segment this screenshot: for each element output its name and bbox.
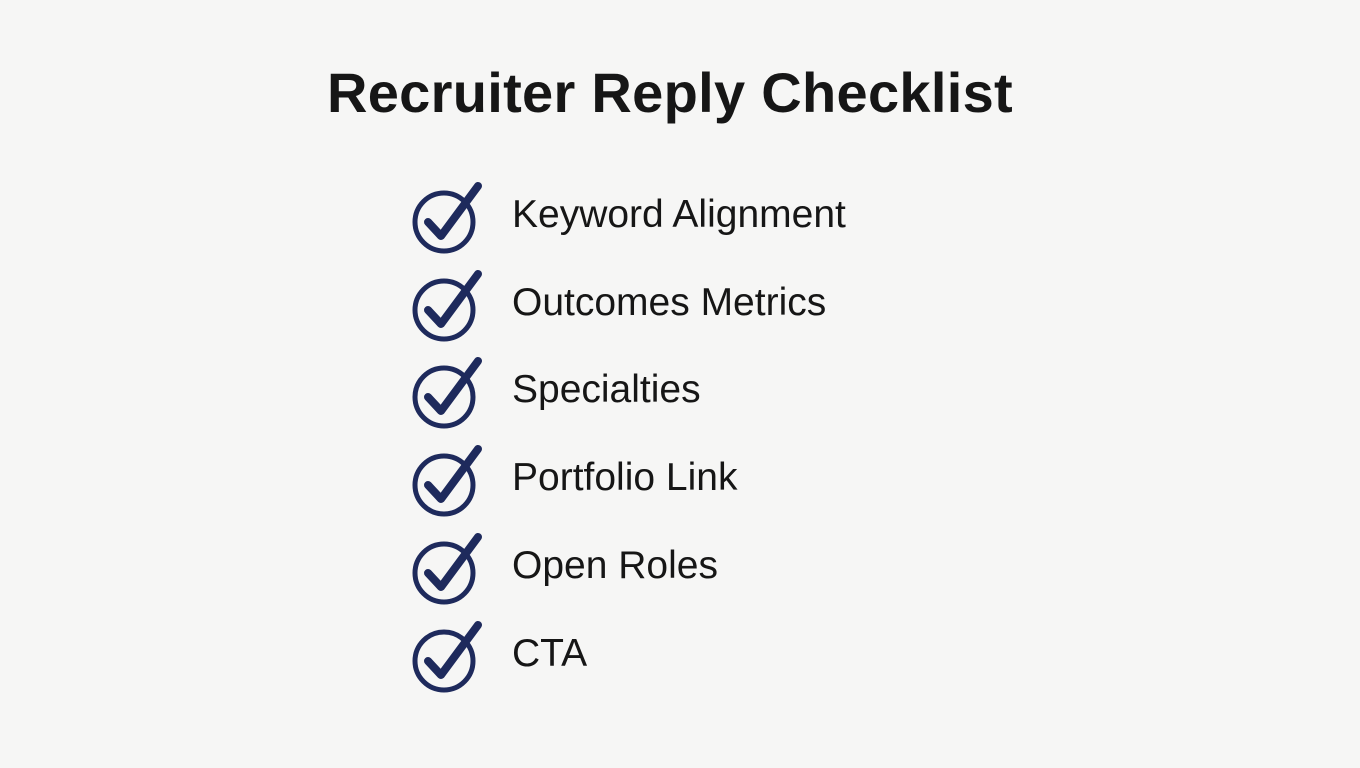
- item: CTA: CTA: [512, 632, 587, 675]
- item: Outcomes Metrics: [412, 270, 826, 342]
- item: Specialties: Specialties: [512, 368, 701, 411]
- item: Open Roles: [412, 533, 718, 604]
- item: Portfolio Link: Portfolio Link: [512, 456, 737, 499]
- item: Keyword Alignment: Keyword Alignment: [512, 193, 846, 236]
- item: Outcomes Metrics: Outcomes Metrics: [512, 281, 826, 324]
- item: Portfolio Link: [412, 445, 738, 516]
- item: Keyword Alignment: [412, 182, 846, 254]
- item: Specialties: [412, 357, 701, 428]
- item: Open Roles: Open Roles: [512, 544, 718, 587]
- title: Recruiter Reply Checklist: [327, 61, 1013, 124]
- item: CTA: [412, 621, 587, 692]
